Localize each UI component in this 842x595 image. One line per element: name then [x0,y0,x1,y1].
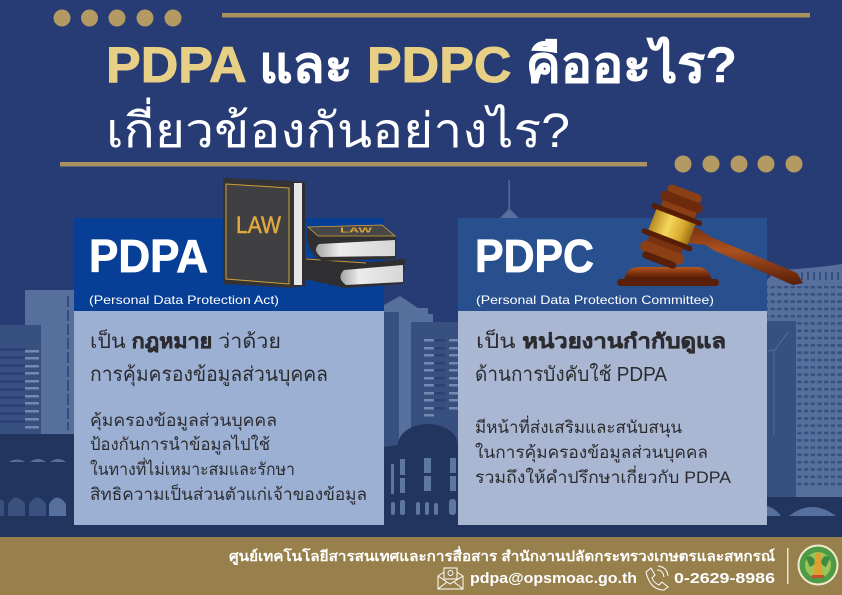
spire [500,180,519,218]
lower book [304,258,405,288]
decorative dots right [674,156,802,172]
footer: organisation name: ศูนย์เทคโนโลยีสารสนเทศและการสื่อสาร สำนักงานปลัดกระทรวงเกษตรและสหกรณ์ [229,546,775,565]
PDPC lead text [475,328,726,386]
PDPA heading: PDPA [89,230,208,282]
rule under title [60,162,647,166]
PDPC description: ในการคุ้มครองข้อมูลส่วนบุคคล [475,442,708,463]
gold band [648,209,696,246]
PDPA lead text: เป็น กฎหมาย ว่าด้วย [90,328,281,353]
upper book label: LAW [340,228,373,234]
gavel handle [687,227,803,285]
upper book [307,225,396,261]
title line 2: เกี่ยวข้องกันอย่างไร? [106,97,570,158]
PDPC body [458,311,767,525]
PDPC description [475,415,732,487]
PDPA subtitle: (Personal Data Protection Act) [89,293,279,307]
top cap [666,183,703,205]
PDPA header [74,218,384,311]
PDPC description: มีหน้าที่ส่งเสริมและสนับสนุน [475,415,682,438]
PDPC header [458,218,767,311]
PDPC description: รวมถึงให้คำปรึกษาเกี่ยวกับ PDPA [475,465,732,487]
footer divider [787,548,788,584]
panel: PDPC [458,218,767,525]
PDPC heading: PDPC [475,230,594,282]
PDPA description [90,411,367,505]
standing book [290,181,305,288]
decorative dots top [54,10,182,26]
footer: phone number: 0-2629-8986 [674,571,775,587]
skyline: right buildings [767,264,842,517]
gavel head [633,180,712,273]
footer band [0,537,842,595]
ground band [0,516,842,537]
PDPA description: ในทางที่ไม่เหมาะสมและรักษา [90,457,295,479]
icon: envelope [438,568,463,589]
PDPA description: ป้องกันการนำข้อมูลไปใช้ [90,434,270,455]
icon: gavel [617,180,803,286]
skyline: left buildings [0,290,75,537]
PDPA description: สิทธิความเป็นส่วนตัวแก่เจ้าของข้อมูล [90,483,367,505]
PDPA body [74,311,384,525]
standing book label: LAW [236,212,281,239]
PDPC subtitle: (Personal Data Protection Committee) [476,293,714,307]
skyline: centre buildings [384,180,519,537]
PDPC lead text: ด้านการบังคับใช้ PDPA [475,363,668,386]
icon: phone [646,566,668,590]
footer: email: pdpa@opsmoac.go.th [470,571,637,587]
bottom cap [647,235,683,255]
PDPA description: คุ้มครองข้อมูลส่วนบุคคล [90,411,277,431]
gavel base [624,267,712,280]
title [106,36,737,158]
icon: law books [223,178,405,288]
PDPC lead text: เป็น หน่วยงานกำกับดูแล [476,328,726,355]
PDPA lead text: การคุ้มครองข้อมูลส่วนบุคคล [90,364,328,387]
PDPA lead text [90,328,328,387]
title line 1: PDPA และ PDPC คืออะไร? [106,36,737,93]
panel: PDPA [74,218,384,525]
icon: ministry emblem [798,544,838,586]
